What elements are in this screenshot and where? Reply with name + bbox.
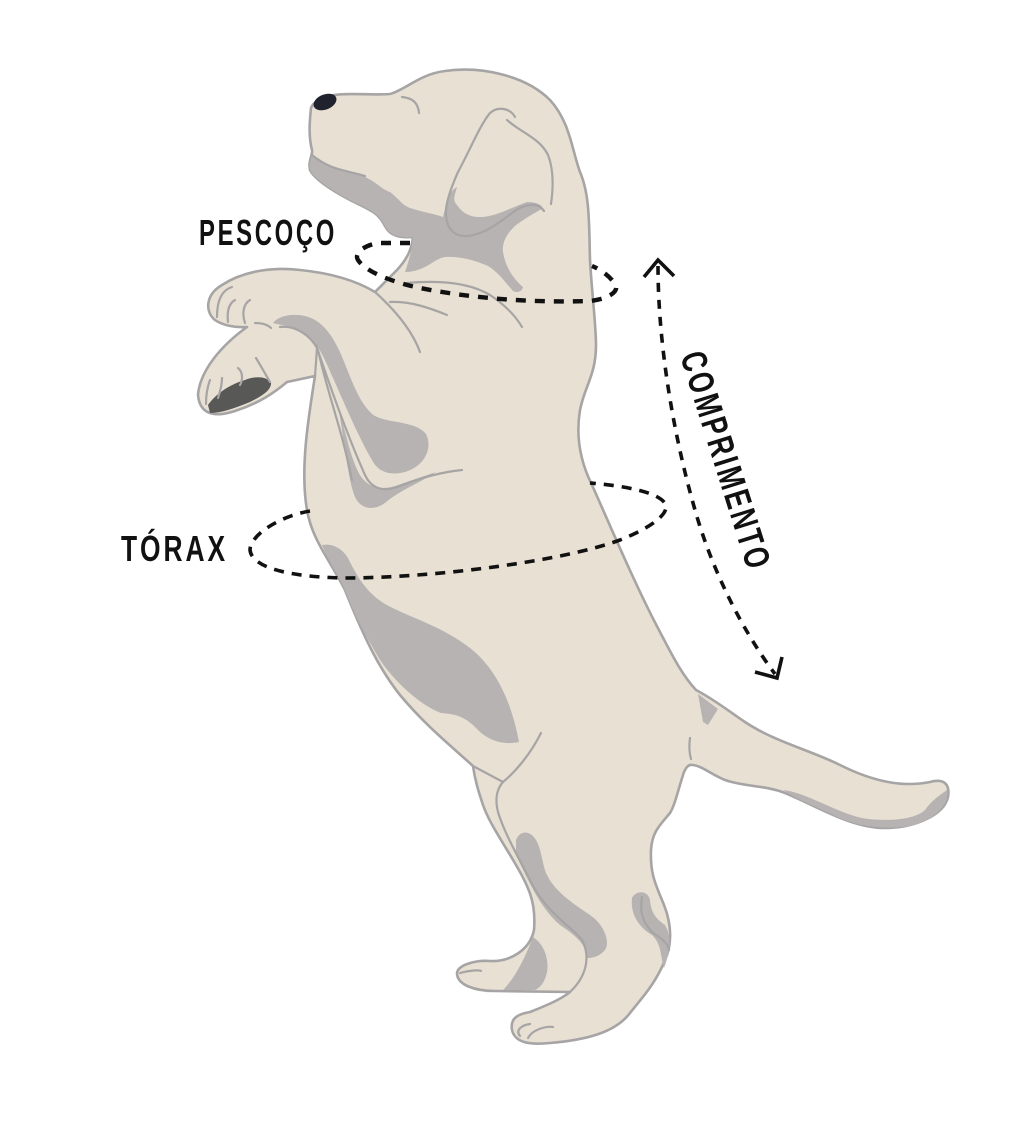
- grey patch: tail base: [698, 694, 718, 725]
- arrow: body length: [644, 260, 782, 678]
- label: tórax: TÓRAX: [121, 527, 228, 569]
- dog body silhouette: [198, 70, 948, 1044]
- label: comprimento: COMPRIMENTO: [672, 346, 780, 576]
- grey patch: tail underside: [783, 790, 947, 828]
- grey patch: elbow fold: [338, 405, 436, 508]
- grey patch: hind leg: [516, 832, 607, 958]
- dog illustration: [198, 70, 948, 1044]
- grey patch: foreleg stripe: [273, 315, 428, 474]
- outline details: ear, folds, toes: [206, 97, 691, 1038]
- grey patch: front foot: [503, 937, 547, 990]
- paw pad: [208, 377, 271, 413]
- grey patch: chin and neck: [310, 155, 543, 292]
- measurement: chest dashed loop: [250, 483, 666, 578]
- nose: [311, 91, 339, 113]
- label: pescoço: PESCOÇO: [199, 212, 337, 253]
- grey patch: heel: [632, 892, 669, 968]
- grey patch: belly: [322, 545, 519, 743]
- measurement: neck dashed loop: [357, 243, 616, 301]
